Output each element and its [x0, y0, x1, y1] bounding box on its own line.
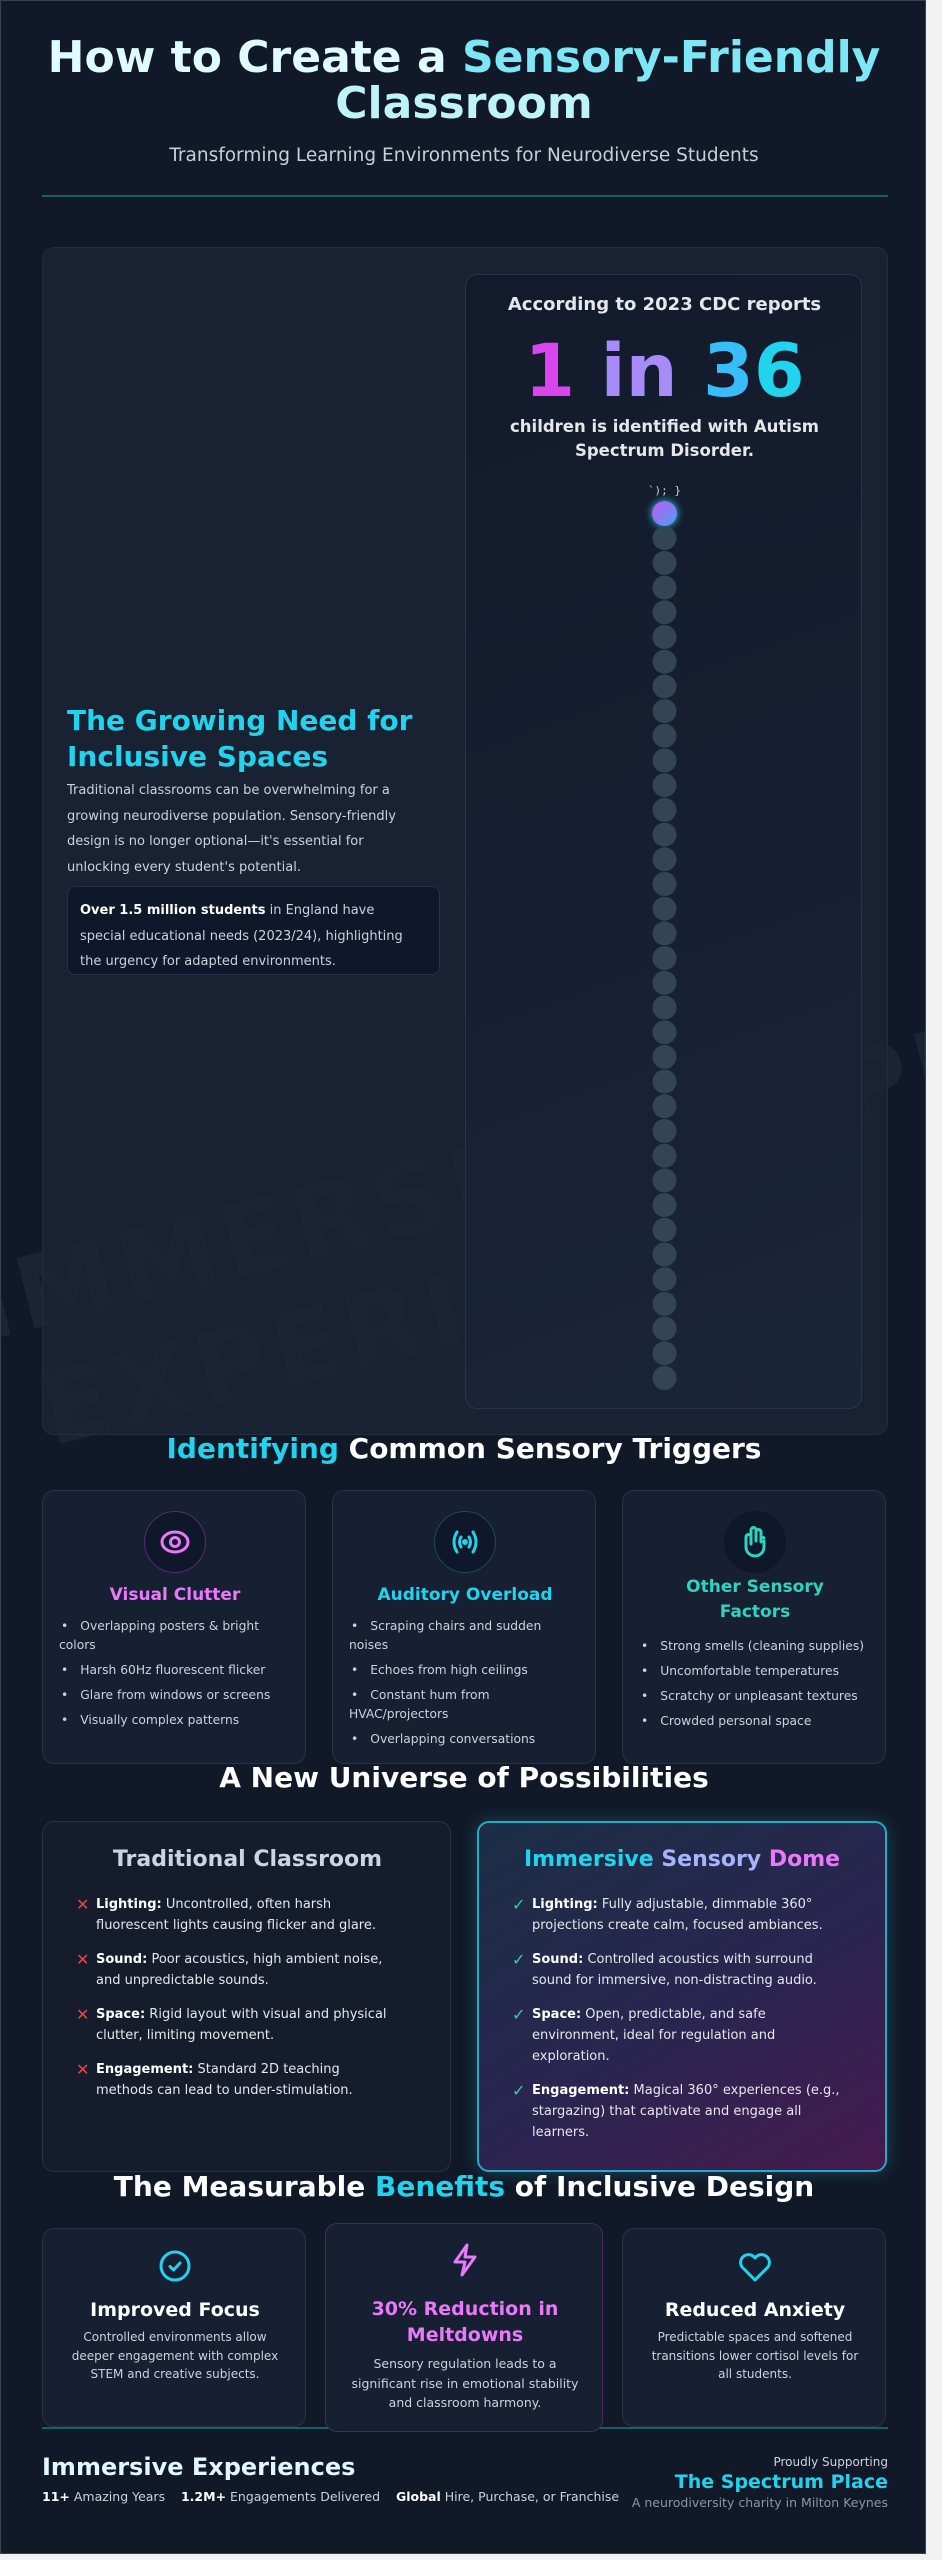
- list: dome benefits: Space: Open, predictable, and safe environment, ideal for regulation and exploration.: [532, 2007, 775, 2064]
- desc: anxiety: Predictable spaces and softened transitions lower cortisol levels for all students.: [652, 2330, 858, 2381]
- panel: CDC stat card: [465, 274, 862, 1409]
- list: other triggers: Scratchy or unpleasant textures: [660, 1689, 858, 1703]
- title: [48, 32, 880, 129]
- list: visual triggers: Visually complex patterns: [80, 1713, 239, 1727]
- icon: heart: [739, 2253, 771, 2282]
- list: traditional drawbacks: ✕: [76, 2060, 89, 2079]
- icon: hand: [724, 1511, 786, 1573]
- icon: sound waves: [434, 1511, 496, 1573]
- panel: visual clutter: [42, 1490, 306, 1764]
- chart: 1 in 36 dots: [646, 495, 683, 1390]
- list: auditory triggers: Echoes from high ceilings: [370, 1663, 528, 1677]
- list: other triggers: Crowded personal space: [660, 1714, 811, 1728]
- list: traditional drawbacks: Lighting: Uncontrolled, often harsh fluorescent lights causing flicker and glare.: [96, 1897, 376, 1933]
- panel: meltdown reduction: [325, 2223, 603, 2432]
- callout: SEN stat: Over 1.5 million students in England have special educational needs (2023/24), highlighting the urgency for adapted environments.: [80, 903, 403, 969]
- icon: check circle: [160, 2250, 190, 2282]
- heading: new universe: A New Universe of Possibilities: [219, 1761, 709, 1794]
- panel: growing need: [42, 247, 888, 1435]
- list: auditory triggers: Constant hum from HVAC/projectors: [349, 1688, 490, 1721]
- text block: intro paragraph: Traditional classrooms can be overwhelming for a growing neurodiverse population. Sensory-friendly design is no longer optional—it's essential for unlocking every student's potential.: [67, 783, 396, 874]
- list: dome benefits: [512, 1895, 840, 2140]
- list: dome benefits: ✓: [512, 1895, 525, 1914]
- title: 30% reduction: [372, 2298, 558, 2346]
- watermark: EXPERIENCES: [29, 1154, 866, 1469]
- footer stats: 11+ Amazing Years 1.2M+ Engagements Delivered Global Hire, Purchase, or Franchise: [42, 2489, 619, 2504]
- callout: SEN stat: [67, 886, 440, 975]
- title: auditory overload: Auditory Overload: [377, 1585, 553, 1605]
- title: 30% reduction: Meltdowns: [407, 2324, 523, 2346]
- title: other sensory factors: Factors: [720, 1602, 790, 1622]
- stat description: children is identified with Autism Spectrum Disorder.: [510, 417, 819, 460]
- footer: brand: [42, 2453, 619, 2504]
- list: dome benefits: Engagement: Magical 360° experiences (e.g., stargazing) that captivate and engage all learners.: [532, 2083, 840, 2140]
- list: dome benefits: Lighting: Fully adjustable, dimmable 360° projections create calm, focused ambiances.: [532, 1897, 823, 1933]
- footer: supporting charity: [632, 2455, 888, 2510]
- list: dome benefits: Sound: Controlled acoustics with surround sound for immersive, non-distracting audio.: [532, 1952, 817, 1988]
- panel: CDC stat card: `); }: [648, 484, 681, 497]
- title: Classroom: [335, 78, 593, 129]
- title: 30% reduction: 30% Reduction in: [372, 2298, 558, 2320]
- list: traditional drawbacks: ✕: [76, 2005, 89, 2024]
- list: traditional drawbacks: ✕: [76, 1950, 89, 1969]
- list: auditory triggers: [349, 1619, 541, 1746]
- list: dome benefits: ✓: [512, 2005, 525, 2024]
- subtitle: Transforming Learning Environments for Neurodiverse Students: [169, 145, 759, 166]
- heading: growing need: The Growing Need for Inclusive Spaces: [67, 704, 412, 773]
- title: immersive dome: Immersive Sensory Dome: [524, 1847, 840, 1872]
- panel: reduced anxiety: [622, 2228, 886, 2427]
- big number: 1 in 36: [524, 329, 805, 414]
- heading: sensory triggers: Identifying Common Sensory Triggers: [167, 1432, 761, 1465]
- title: improved focus: Improved Focus: [90, 2299, 260, 2321]
- footer: supporting charity: A neurodiversity charity in Milton Keynes: [632, 2495, 888, 2510]
- list: auditory triggers: Scraping chairs and sudden noises: [349, 1619, 541, 1652]
- list: other triggers: Strong smells (cleaning supplies): [660, 1639, 864, 1653]
- title: visual clutter: Visual Clutter: [110, 1585, 240, 1605]
- footer: supporting charity: The Spectrum Place: [675, 2471, 888, 2493]
- list: other triggers: Uncomfortable temperatures: [660, 1664, 839, 1678]
- footer: brand: Immersive Experiences: [42, 2453, 355, 2481]
- stat heading: According to 2023 CDC reports: [508, 294, 821, 315]
- heading: measurable benefits: The Measurable Benefits of Inclusive Design: [114, 2170, 814, 2203]
- panel: immersive dome: [477, 1821, 887, 2172]
- title: reduced anxiety: Reduced Anxiety: [665, 2299, 845, 2321]
- title: other sensory factors: Other Sensory: [686, 1577, 824, 1597]
- list: visual triggers: Glare from windows or screens: [80, 1688, 270, 1702]
- desc: meltdowns: Sensory regulation leads to a significant rise in emotional stability and classroom harmony.: [352, 2356, 578, 2410]
- list: traditional drawbacks: [76, 1895, 387, 2098]
- panel: other sensory: [622, 1490, 886, 1764]
- list: visual triggers: Harsh 60Hz fluorescent flicker: [80, 1663, 265, 1677]
- panel: traditional classroom: [42, 1821, 451, 2172]
- list: traditional drawbacks: Sound: Poor acoustics, high ambient noise, and unpredictable sounds.: [96, 1952, 382, 1988]
- list: traditional drawbacks: Engagement: Standard 2D teaching methods can lead to under-stimulation.: [96, 2062, 353, 2098]
- panel: auditory overload: [332, 1490, 596, 1764]
- list: dome benefits: ✓: [512, 1950, 525, 1969]
- list: traditional drawbacks: ✕: [76, 1895, 89, 1914]
- panel: improved focus: [42, 2228, 306, 2427]
- desc: focus: Controlled environments allow deeper engagement with complex STEM and creative subjects.: [72, 2330, 278, 2381]
- title: How to Create a Sensory-Friendly: [48, 32, 880, 83]
- icon: lightning bolt: [453, 2244, 477, 2276]
- list: traditional drawbacks: Space: Rigid layout with visual and physical clutter, limiting movement.: [96, 2007, 387, 2043]
- footer: supporting charity: Proudly Supporting: [773, 2455, 888, 2469]
- title: other sensory factors: [686, 1577, 824, 1622]
- list: visual triggers: Overlapping posters & bright colors: [59, 1619, 259, 1652]
- list: visual triggers: [59, 1619, 270, 1727]
- list: other triggers: [642, 1639, 864, 1728]
- title: traditional: Traditional Classroom: [113, 1847, 382, 1872]
- icon: eye: [144, 1511, 206, 1573]
- list: auditory triggers: Overlapping conversations: [370, 1732, 535, 1746]
- list: dome benefits: ✓: [512, 2081, 525, 2100]
